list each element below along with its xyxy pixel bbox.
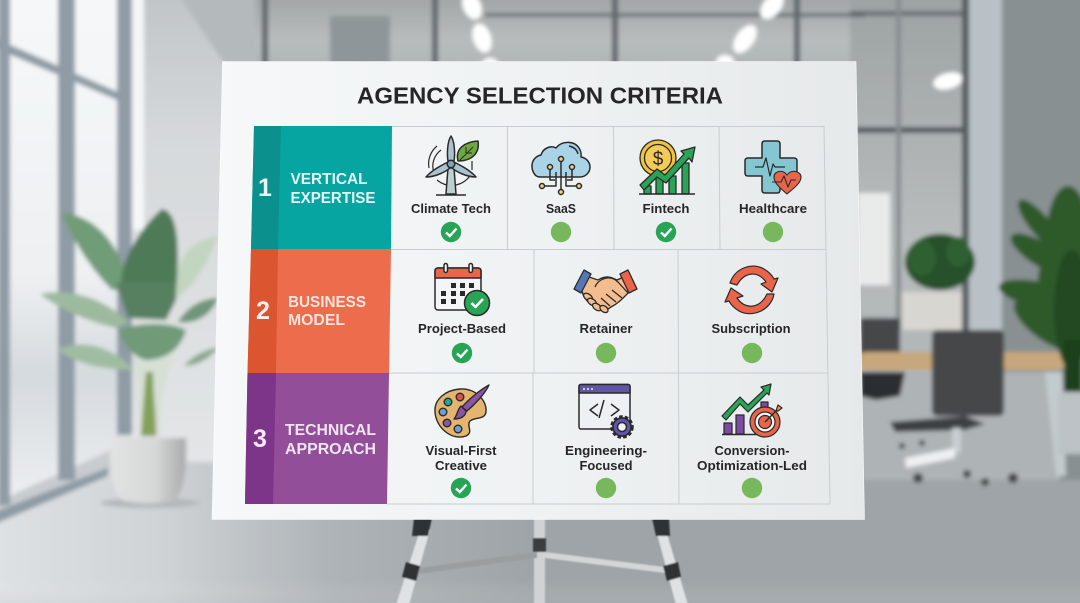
ceiling lights <box>458 0 964 92</box>
chair back <box>932 330 1004 416</box>
title bar <box>579 384 630 393</box>
marker: conversion-optimization-led <box>742 478 762 498</box>
left plant leaves <box>40 209 219 370</box>
left plant pot shadow <box>100 498 200 508</box>
marker: project-based checked <box>452 343 472 363</box>
marker: retainer <box>596 343 616 363</box>
heart ecg <box>772 176 796 187</box>
base line <box>639 193 695 195</box>
icon: fintech coin and growth <box>639 140 695 194</box>
floor shading <box>0 462 1080 603</box>
finger creases <box>601 290 622 306</box>
icon: refresh arrows <box>725 266 778 314</box>
window mullions <box>0 0 136 526</box>
dart <box>765 409 778 422</box>
icon: calendar with check <box>435 264 490 316</box>
dollar sign: $ <box>653 149 664 170</box>
base line <box>722 434 758 436</box>
marker: fintech checked <box>656 222 676 242</box>
column <box>969 0 1002 330</box>
dashed rings <box>429 146 472 185</box>
back plant <box>905 234 975 290</box>
icon: wind turbine with leaf <box>426 136 478 195</box>
back chair seat <box>860 372 905 400</box>
ground line <box>436 194 466 196</box>
marker: subscription <box>742 343 762 363</box>
right brace <box>545 552 665 573</box>
white panel <box>858 193 890 285</box>
purple strip <box>245 373 276 504</box>
paint wells <box>456 393 464 401</box>
heading: vertical expertise: EXPERTISE <box>290 190 376 207</box>
label: project-based: Project-Based <box>418 322 506 336</box>
calendar header <box>435 268 481 278</box>
label: saas: SaaS <box>546 202 576 216</box>
right cuff <box>620 270 637 293</box>
date cells <box>441 283 474 304</box>
label: retainer: Retainer <box>580 322 633 336</box>
chair leg <box>905 448 955 468</box>
left plant stem <box>141 372 156 436</box>
leaf <box>457 141 478 161</box>
poster board <box>212 62 864 520</box>
title: AGENCY SELECTION CRITERIA <box>357 82 723 108</box>
icon: code window with gear <box>579 384 632 437</box>
marker: climate tech checked <box>441 222 461 242</box>
label: healthcare: Healthcare <box>739 202 807 216</box>
marker: engineering-focused <box>596 478 616 498</box>
chair stem <box>952 428 961 453</box>
marker: healthcare <box>763 222 783 242</box>
heart <box>774 171 801 194</box>
label: subscription: Subscription <box>712 322 790 336</box>
left wall <box>130 0 270 490</box>
icon: handshake <box>574 270 637 314</box>
hub <box>447 160 455 168</box>
label: visual-first creative: Visual-First <box>426 444 497 458</box>
orange block <box>248 249 391 373</box>
label: visual-first creative: Creative <box>435 459 487 473</box>
left top clamp <box>412 518 432 536</box>
heading: technical approach: APPROACH <box>285 441 376 458</box>
bars <box>644 163 689 194</box>
back wall mullions <box>262 0 865 80</box>
label: conversion-optimization-led: Conversion- <box>714 444 790 458</box>
orange strip <box>248 249 278 373</box>
icon: medical cross with heart <box>745 141 801 194</box>
back chair <box>860 318 900 354</box>
label: conversion-optimization-led: Optimization-Led <box>697 459 807 473</box>
right leg <box>656 530 688 603</box>
gear <box>612 417 632 437</box>
growth arrow <box>640 147 695 190</box>
upper left wall block <box>330 16 390 71</box>
floor left <box>0 462 560 603</box>
circuit traces <box>545 162 577 189</box>
light strip at window edge <box>132 0 144 230</box>
coin <box>640 140 676 176</box>
floor right <box>540 480 1080 603</box>
purple block <box>245 373 389 504</box>
calendar body <box>435 268 481 310</box>
target rings <box>750 407 780 437</box>
window dots <box>583 388 593 390</box>
check badge <box>464 290 490 316</box>
marker: saas <box>551 222 571 242</box>
cloud highlight <box>569 146 578 154</box>
teal block <box>251 126 392 249</box>
window panes <box>0 0 133 505</box>
chair casters <box>899 440 1018 486</box>
left cuff <box>574 270 591 293</box>
chair seat <box>890 416 985 432</box>
easel <box>396 515 688 603</box>
wall shadow diagonal <box>175 0 262 120</box>
label: engineering-focused: Engineering- <box>565 444 647 458</box>
label: fintech: Fintech <box>642 202 690 216</box>
brush handle <box>462 385 489 411</box>
back plant pot area <box>902 292 962 330</box>
palette <box>435 389 486 437</box>
circuit nodes <box>540 156 582 194</box>
blades <box>447 136 455 161</box>
left plant pale stems <box>132 345 178 436</box>
brush tip <box>454 406 466 419</box>
thumb <box>595 278 628 293</box>
heading: business model: MODEL <box>288 312 345 329</box>
bars <box>724 402 768 434</box>
marker: visual-first checked <box>451 478 471 498</box>
heading: technical approach: TECHNICAL <box>285 422 376 439</box>
right pot <box>1058 392 1080 454</box>
back glass wall <box>255 0 975 90</box>
label: climate tech: Climate Tech <box>411 202 491 216</box>
heading: vertical expertise: VERTICAL <box>290 171 368 188</box>
panel: vertical expertise header <box>251 126 392 249</box>
cloud <box>532 142 590 177</box>
cross <box>745 141 797 193</box>
desk top <box>860 352 1065 370</box>
left collar <box>402 562 420 581</box>
board panel <box>212 62 864 520</box>
icon: paint palette <box>435 385 489 437</box>
heading: business model: BUSINESS <box>288 294 366 311</box>
number 1: 1 <box>258 174 272 202</box>
right top clamp <box>652 518 670 536</box>
right glass wall frames <box>850 0 969 330</box>
lower glass area behind desk <box>860 372 1060 480</box>
number 3: 3 <box>253 425 267 453</box>
panel: business model header <box>248 249 391 373</box>
center clamp <box>533 538 546 552</box>
top arrow <box>730 266 778 292</box>
right concrete wall <box>1000 0 1080 490</box>
label: engineering-focused: Focused <box>580 459 632 473</box>
rings <box>444 264 472 272</box>
grid lines <box>387 126 830 504</box>
hands <box>582 276 630 310</box>
teal strip <box>251 126 281 249</box>
icon: cloud circuit <box>532 142 590 194</box>
center pole <box>534 515 545 603</box>
growth arrow <box>722 384 771 420</box>
table leg <box>1045 372 1066 476</box>
icon: growth chart with target <box>722 384 782 437</box>
left plant pot <box>110 438 186 504</box>
right collar <box>663 562 681 581</box>
ecg line <box>755 158 785 176</box>
mast <box>446 168 456 194</box>
fingers <box>582 292 609 314</box>
bottom arrow <box>725 288 774 314</box>
panel: technical approach header <box>245 373 389 504</box>
right plant <box>996 186 1080 392</box>
code symbol <box>590 400 619 418</box>
right glass wall <box>850 0 970 490</box>
left leg <box>396 530 430 603</box>
number 2: 2 <box>256 297 270 325</box>
left brace <box>418 552 537 574</box>
window <box>579 384 630 429</box>
